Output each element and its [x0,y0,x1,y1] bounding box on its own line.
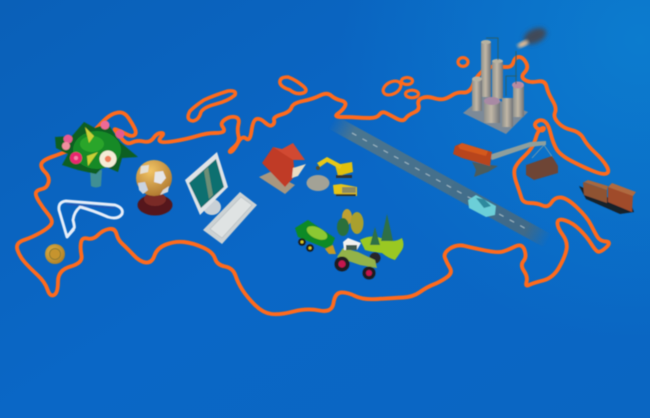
flame [516,39,530,49]
pink flowers [70,152,82,164]
white daisy [100,150,116,168]
leaves [55,122,138,174]
tractor body [370,252,380,264]
boom [489,141,546,160]
crane lifting a container [453,141,558,180]
vase [90,170,102,188]
yellow excavator [316,157,353,178]
smoke [521,25,549,47]
bouquet of flowers in a vase [55,120,138,188]
cylinders [481,42,491,97]
trophy soccer ball on stand [136,160,172,216]
ribbon [59,201,122,237]
stand [138,194,172,216]
red house on base [259,143,306,194]
grass patch [360,236,404,260]
monitor stand [203,199,221,215]
grey rock pile [306,175,330,191]
crane base [472,162,498,177]
blue car on the road [468,195,496,217]
containers [583,182,607,203]
green tractor with trailer [295,220,380,280]
oil refinery with smoke [463,25,549,134]
trailer [295,220,335,250]
keyboard [203,192,257,244]
green field with trees [337,209,404,260]
arctic island [280,77,306,94]
road [332,122,548,241]
mainland outline [17,57,609,314]
pipes [486,38,517,96]
desktop computer [185,152,257,244]
cable [532,145,553,158]
cargo ship with containers [579,180,636,214]
crane body [453,143,492,166]
ring islands [381,58,468,98]
hull [579,186,634,214]
northern island [188,91,235,121]
yellow truck [333,184,357,196]
base [463,95,528,134]
autumn trees [342,209,352,225]
medal with ribbon [45,201,122,264]
monitor [185,152,228,215]
ball [136,160,172,196]
orange cord outline of the map [17,57,609,314]
medal [45,244,65,264]
fir trees [381,214,393,241]
hanging container [526,156,558,180]
